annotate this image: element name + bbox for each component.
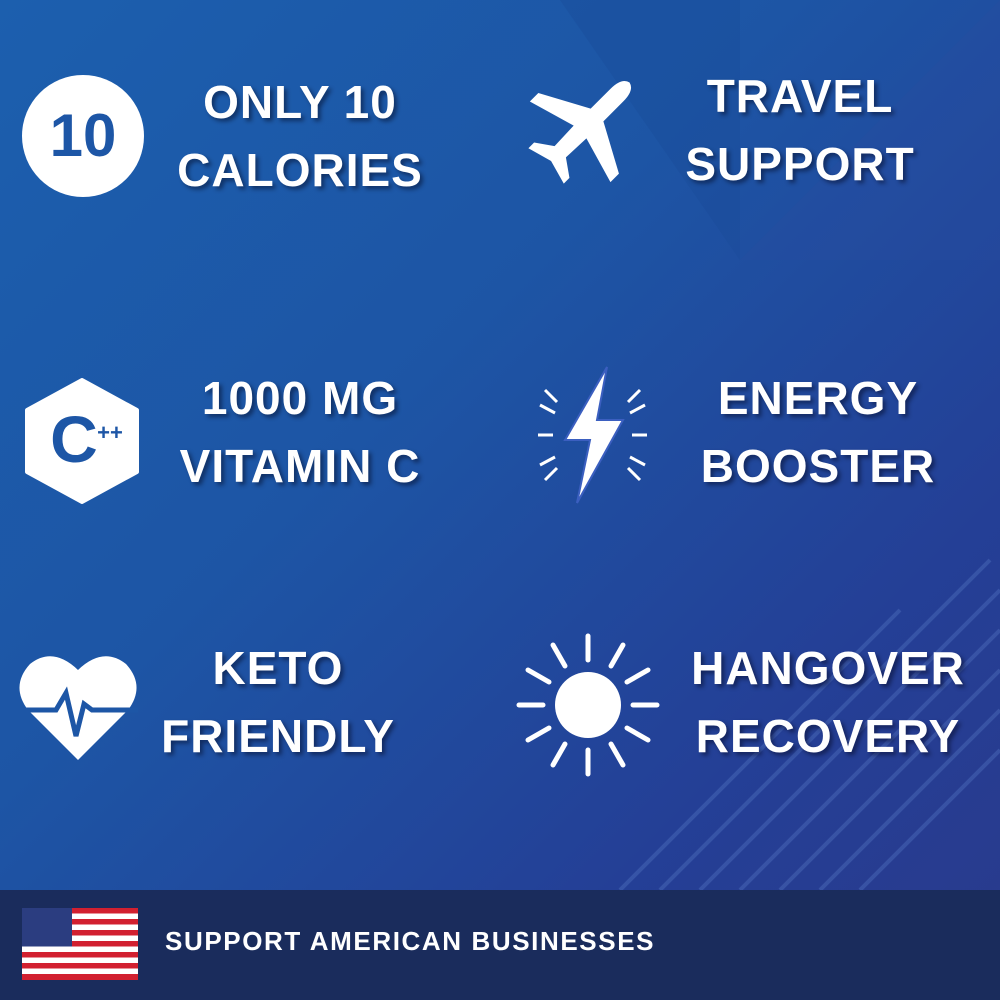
icon: 10 circle: 10 (50, 102, 116, 169)
text: travel support (685, 70, 918, 190)
text: travel support: SUPPORT (685, 138, 915, 190)
text: only 10 calories: ONLY 10 (203, 76, 397, 128)
text: hangover recovery: HANGOVER (691, 642, 965, 694)
icon: sun (516, 634, 660, 776)
text: energy booster (701, 372, 937, 492)
text: 1000 mg vitamin c (180, 372, 422, 492)
icon: lightning (538, 366, 647, 504)
text: hangover recovery (691, 642, 966, 762)
text: keto friendly: FRIENDLY (161, 710, 395, 762)
text: only 10 calories (177, 76, 426, 196)
text: hangover recovery: RECOVERY (696, 710, 960, 762)
text: 1000 mg vitamin c: 1000 MG (202, 372, 398, 424)
text: only 10 calories: CALORIES (177, 144, 423, 196)
icon: 10 circle (22, 75, 144, 197)
text: keto friendly (161, 642, 397, 762)
icon: vitamin C hexagon: ++ (97, 420, 123, 445)
text: 1000 mg vitamin c: VITAMIN C (180, 440, 420, 492)
text: energy booster: ENERGY (718, 372, 918, 424)
text: support american businesses: SUPPORT AMERICAN BUSINESSES (165, 926, 655, 956)
text: keto friendly: KETO (213, 642, 343, 694)
text: travel support: TRAVEL (707, 70, 893, 122)
icon: heart (20, 656, 136, 760)
text: energy booster: BOOSTER (701, 440, 935, 492)
icon: vitamin C hexagon (25, 378, 139, 504)
bottom banner (0, 890, 1000, 1000)
icon: US flag (22, 908, 138, 980)
icon: vitamin C hexagon: C (50, 402, 98, 476)
icon: plane (528, 81, 632, 184)
